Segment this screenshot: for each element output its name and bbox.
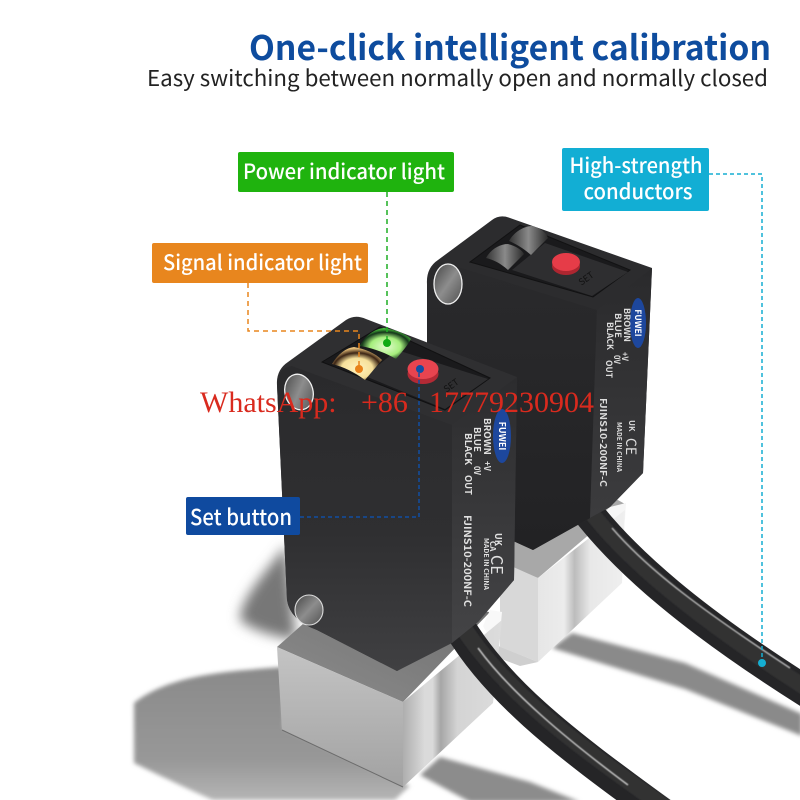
leader line: conductors xyxy=(709,174,766,667)
label: power indicator light: Power indicator light xyxy=(243,156,445,186)
front sensor wiring text: 0V xyxy=(471,466,484,475)
rear sensor side face xyxy=(590,268,652,518)
rear sensor button xyxy=(552,253,580,275)
rear sensor wiring text: MADE IN CHINA xyxy=(615,422,625,473)
rear sensor wiring text: +V xyxy=(619,352,631,362)
rear sensor wiring text: BROWN xyxy=(621,308,633,342)
front sensor button xyxy=(408,359,438,384)
front sensor wiring text: MADE IN CHINA xyxy=(482,538,492,591)
watermark: +86 xyxy=(361,386,408,419)
rear sensor top recess xyxy=(470,225,630,297)
rear mounting block xyxy=(490,490,626,662)
floor shadows xyxy=(134,545,800,800)
front sensor FUWEI badge: FUWEI xyxy=(496,422,509,450)
rear sensor lens xyxy=(434,264,462,304)
rear sensor SET marking: SET xyxy=(576,268,597,288)
leader line: set button xyxy=(300,365,424,517)
rear sensor FUWEI badge: FUWEI xyxy=(632,309,644,337)
label: high-strength conductors xyxy=(562,148,709,211)
front sensor recess xyxy=(322,327,490,410)
front mounting block xyxy=(277,600,502,787)
rear sensor wiring text: BLACK xyxy=(604,322,616,350)
green LED xyxy=(360,328,411,359)
rear sensor button panel xyxy=(512,243,628,296)
front sensor SET marking: SET xyxy=(441,375,462,395)
rear sensor wiring text: CE xyxy=(621,438,641,455)
rear sensor wiring text: BLUE xyxy=(612,313,624,338)
label: set button: Set button xyxy=(190,500,292,532)
front sensor side face xyxy=(452,377,517,643)
title: One-click intelligent calibration xyxy=(249,21,771,70)
label: high-strength conductors: High-strength xyxy=(570,150,702,180)
rear sensor wiring text: 0V xyxy=(611,355,623,365)
front cable xyxy=(450,610,672,800)
front sensor wiring text: FJINS10-200NF-C xyxy=(461,515,476,607)
rear sensor wiring text: OUT xyxy=(603,360,615,379)
front sensor body xyxy=(277,317,517,671)
rear sensor front face xyxy=(427,262,597,550)
watermark: 17779230904 xyxy=(429,386,594,419)
rear sensor xyxy=(427,216,652,550)
rear sensor body xyxy=(427,216,652,550)
watermark: WhatsApp: xyxy=(200,386,337,419)
front sensor xyxy=(277,317,517,671)
front sensor wiring text: CE xyxy=(486,555,510,575)
front sensor wiring text: UK xyxy=(492,533,505,547)
rear sensor wiring text xyxy=(597,308,641,487)
rear sensor FUWEI badge xyxy=(630,298,646,348)
label: high-strength conductors: conductors xyxy=(584,176,692,206)
top lens xyxy=(281,371,317,413)
rear sensor wiring text: FJINS10-200NF-C xyxy=(597,398,611,487)
front sensor wiring text xyxy=(461,418,510,607)
rear sensor LEDs xyxy=(486,226,548,270)
front sensor wiring text: BLUE xyxy=(471,427,484,452)
subtitle: Easy switching between normally open and normally closed xyxy=(147,61,768,93)
leader line: signal indicator xyxy=(248,283,363,373)
bottom lens xyxy=(295,595,323,625)
amber LED xyxy=(332,347,382,380)
leader line: power indicator xyxy=(383,192,391,347)
rear sensor wiring text: UK xyxy=(626,420,637,432)
front sensor wiring text: CA xyxy=(487,541,498,552)
front sensor wiring text: BLACK xyxy=(462,433,475,466)
front sensor FUWEI badge xyxy=(493,409,511,463)
front sensor wiring text: OUT xyxy=(462,475,475,495)
rear cable xyxy=(575,495,800,697)
front sensor button panel xyxy=(365,350,488,409)
front sensor wiring text: BROWN xyxy=(481,418,494,455)
front sensor wiring text: +V xyxy=(481,461,494,471)
front sensor face xyxy=(277,366,452,671)
label: signal indicator light: Signal indicator light xyxy=(163,247,362,277)
